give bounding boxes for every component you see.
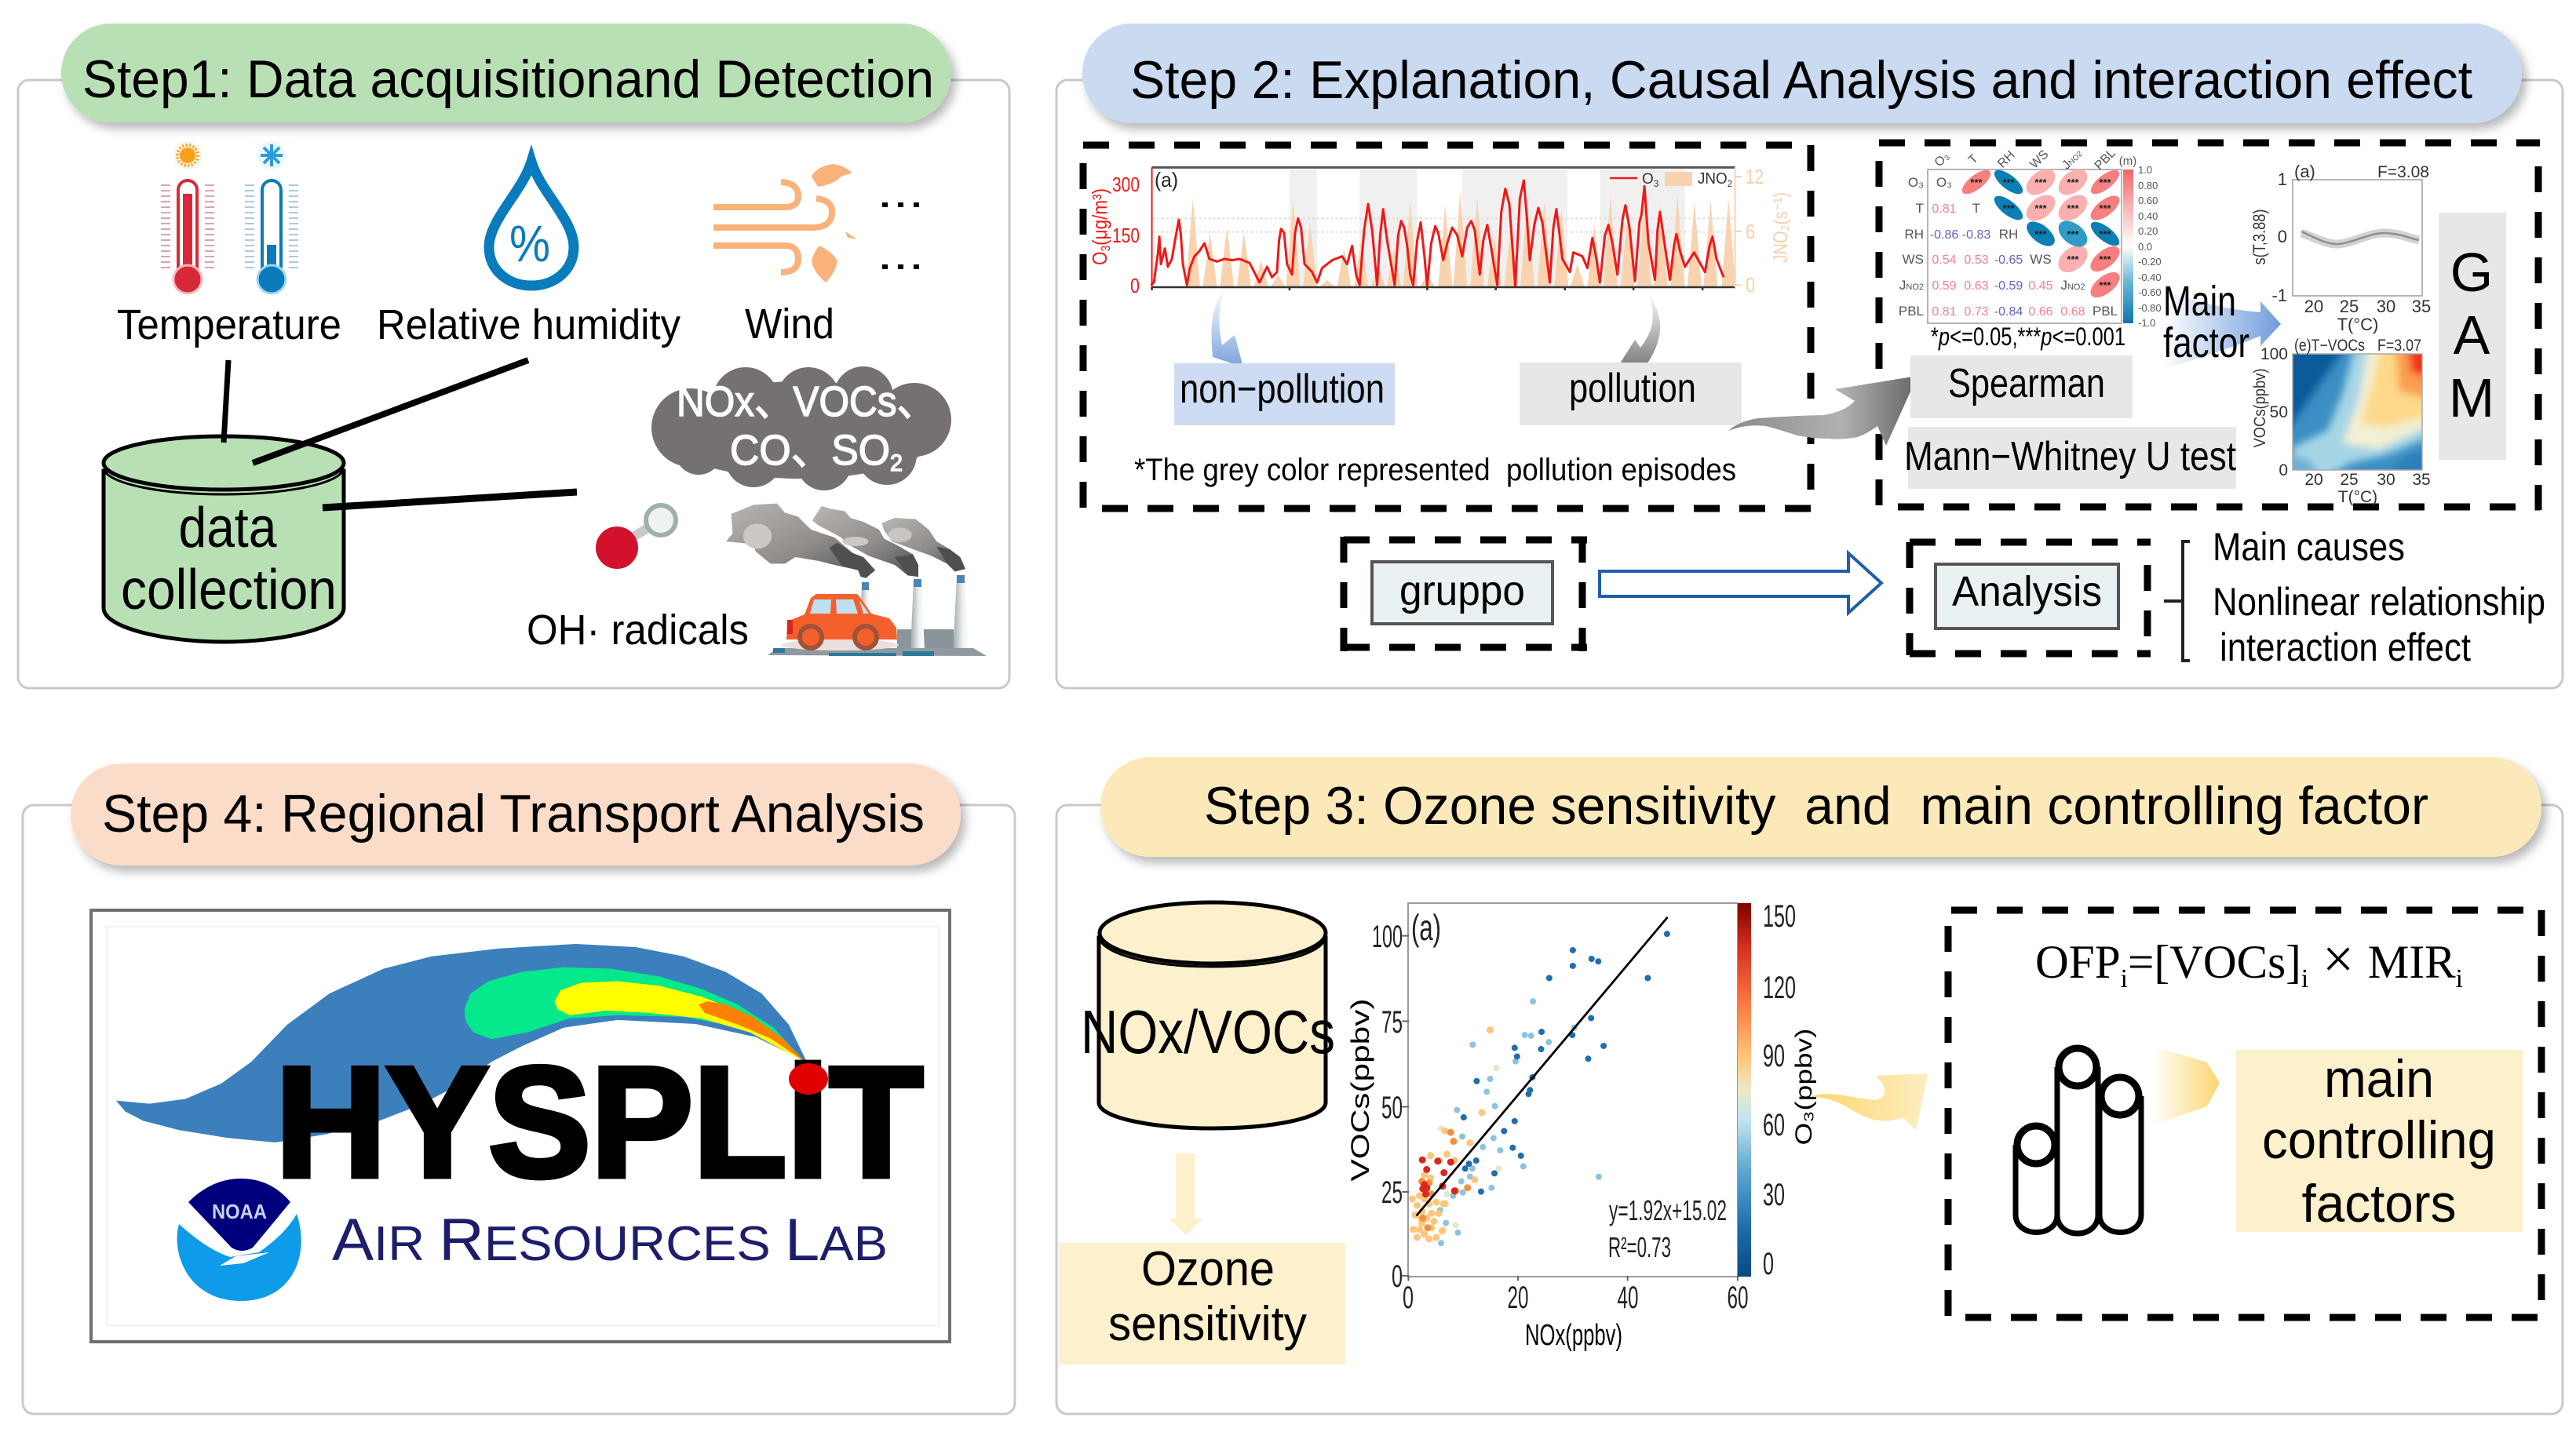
chart: Spearman correlation matrix: 0.0 <box>2138 241 2152 253</box>
icon: NOAA logo: NOAA <box>212 1200 267 1223</box>
formula: OFP: OFP <box>2035 936 2122 988</box>
label: Air Resources Lab: AIR RESOURCES LAB <box>332 1207 888 1273</box>
chart: GAM smooth function of temperature: s(T,3.88) <box>2249 209 2269 265</box>
chart: GAM T-VOCs interaction heatmap: 35 <box>2412 471 2431 489</box>
formula: OFP: MIR <box>2368 936 2456 988</box>
box: main controlling factors: controlling <box>2262 1110 2496 1170</box>
icon: hot thermometer <box>166 141 210 293</box>
heading pill: step 3 <box>1100 757 2541 857</box>
chart: O3 and JNO2 time series: O <box>1642 171 1654 188</box>
chart: VOCs vs NOx scatter: 100 <box>1372 920 1403 954</box>
chart: Spearman correlation matrix: WS <box>2030 252 2052 267</box>
box: non-pollution <box>1174 363 1395 425</box>
chart: GAM T-VOCs interaction heatmap: 50 <box>2270 403 2288 421</box>
chart: Spearman correlation matrix: *** <box>2067 202 2080 214</box>
chart: VOCs vs NOx scatter: 50 <box>1381 1091 1403 1125</box>
chart: Spearman correlation matrix: *** <box>2099 253 2112 265</box>
list: analysis results <box>2213 525 2545 669</box>
chart: Spearman correlation matrix: (m) <box>2119 155 2136 168</box>
chart: VOCs vs NOx scatter: (a) <box>1411 907 1441 948</box>
note: grey color meaning: *The grey color represented pollution episodes <box>1134 453 1736 487</box>
chart: Spearman correlation matrix: -0.80 <box>2138 302 2162 314</box>
chart: O3 and JNO2 time series <box>1088 165 1792 297</box>
database cylinder: NOx/VOCs <box>1081 902 1335 1128</box>
chart: Spearman correlation matrix: 0.20 <box>2138 225 2158 237</box>
chart: VOCs vs NOx scatter: 0 <box>1392 1259 1403 1294</box>
chart: Spearman correlation matrix: -0.59 <box>1994 279 2023 293</box>
chart: Spearman correlation matrix: O₃ <box>1908 175 1924 190</box>
box: pollution <box>1520 363 1742 425</box>
chart: GAM smooth function of temperature: 0 <box>2278 227 2287 246</box>
box: main controlling factors: factors <box>2301 1174 2457 1233</box>
heading pill: step 2 <box>1082 24 2522 123</box>
image frame: HYSPLIT logo <box>91 910 950 1342</box>
dashed box: analysis: Analysis <box>1952 568 2102 615</box>
cloud: pollutant species: 2 <box>890 450 903 476</box>
chart: GAM T-VOCs interaction heatmap: 20 <box>2304 471 2323 489</box>
chart: VOCs vs NOx scatter: 30 <box>1763 1178 1785 1212</box>
icon: humidity drop: % <box>509 214 550 272</box>
chart: Spearman correlation matrix: 0.81 <box>1932 202 1957 216</box>
chart: Spearman correlation matrix: PBL <box>1899 304 1924 319</box>
label: main factor: factor <box>2163 319 2249 366</box>
database cylinder: data collection: data <box>179 497 277 559</box>
chart: Spearman correlation matrix: 1.0 <box>2138 164 2152 176</box>
chart: O3 and JNO2 time series: (μg/m³) <box>1088 188 1111 246</box>
chart: Spearman correlation matrix: 0.81 <box>1932 305 1957 319</box>
chart: O3 and JNO2 time series: 3 <box>1100 246 1113 252</box>
chart: GAM smooth function of temperature: 1 <box>2278 169 2287 189</box>
heading pill: step 2: Step 2: Explanation, Causal Analysis and interaction effect <box>1130 50 2472 110</box>
chart: Spearman correlation matrix: *** <box>2067 228 2080 240</box>
chart: VOCs vs NOx scatter: O₃(ppbv) <box>1791 1028 1817 1146</box>
chart: Spearman correlation matrix: 0.73 <box>1964 305 1989 319</box>
chart: VOCs vs NOx scatter: VOCs(ppbv) <box>1346 998 1374 1182</box>
box: non-pollution: non−pollution <box>1180 366 1385 412</box>
chart: GAM T-VOCs interaction heatmap: 0 <box>2279 461 2288 479</box>
formula: OFP: =[VOCs] <box>2128 936 2301 988</box>
chart: Spearman correlation matrix: *** <box>2067 253 2080 265</box>
chart: Spearman correlation matrix: T <box>1972 201 1980 216</box>
chart: VOCs vs NOx scatter: 90 <box>1763 1039 1785 1073</box>
box: pollution: pollution <box>1569 366 1696 411</box>
icon: wind and leaves <box>713 164 857 282</box>
chart: VOCs vs NOx scatter: y=1.92x+15.02 <box>1609 1194 1727 1226</box>
chart: O3 and JNO2 time series: 2 <box>1728 178 1732 189</box>
bracket: analysis results <box>2164 541 2190 661</box>
connector lines to cylinder <box>224 360 577 508</box>
box: Mann-Whitney U test <box>1904 427 2236 489</box>
chart: Spearman correlation matrix: *** <box>2099 177 2112 188</box>
chart: VOCs vs NOx scatter: 60 <box>1727 1281 1749 1315</box>
chart: Spearman correlation matrix: -0.83 <box>1962 228 1990 242</box>
icon: factory smoke and car <box>726 504 987 656</box>
chart: Spearman correlation matrix: PBL <box>2093 147 2118 173</box>
icon: three cylinders <box>2016 1048 2141 1233</box>
chart: GAM smooth function of temperature: F=3.08 <box>2377 163 2429 181</box>
box: GAM: A <box>2454 304 2490 366</box>
chart: Spearman correlation matrix: JNO2 <box>2060 147 2085 172</box>
label: wind: Wind <box>745 301 834 348</box>
chart: GAM T-VOCs interaction heatmap: T(°C) <box>2338 488 2377 506</box>
heading pill: step 1: Step1: Data acquisitionand Detection <box>82 49 934 109</box>
chart: GAM smooth function of temperature: 35 <box>2412 297 2431 316</box>
chart: VOCs vs NOx scatter: NOx(ppbv) <box>1525 1319 1622 1352</box>
dashed box: analysis <box>1910 542 2151 655</box>
chart: Spearman correlation matrix: RH <box>1995 148 2018 171</box>
icon: OH radical molecule <box>596 505 676 569</box>
dashed box: gruppo <box>1344 537 1587 651</box>
chart: GAM smooth function of temperature: (a) <box>2294 162 2315 181</box>
chart: Spearman correlation matrix: JNO2 <box>1899 278 1924 293</box>
chart: VOCs vs NOx scatter: R²=0.73 <box>1608 1231 1671 1263</box>
chart: Spearman correlation matrix: -0.60 <box>2138 286 2162 298</box>
chart: Spearman correlation matrix: -0.86 <box>1930 228 1958 242</box>
chart: Spearman correlation matrix: -0.65 <box>1994 253 2023 267</box>
chart: GAM smooth function of temperature: -1 <box>2271 286 2287 305</box>
heading pill: step 1 <box>61 24 951 122</box>
large arrow: pollution to Spearman <box>1728 376 1917 446</box>
arrow: gruppo to analysis <box>1600 553 1881 613</box>
heading pill: step 4: Step 4: Regional Transport Analysis <box>102 784 925 844</box>
chart: Spearman correlation matrix: 0.80 <box>2138 180 2158 191</box>
dashed box: ozone time series <box>1083 145 1811 510</box>
icon: cold thermometer <box>250 141 294 293</box>
chart: GAM smooth function of temperature: 25 <box>2340 297 2359 316</box>
label: temperature: Temperature <box>117 301 341 348</box>
chart: Spearman correlation matrix: WS <box>1903 252 1924 267</box>
box: main controlling factors <box>2236 1049 2523 1233</box>
image frame: HYSPLIT logo: HYSPLiT <box>275 1035 923 1210</box>
chart: GAM smooth function of temperature: 20 <box>2304 297 2323 316</box>
chart: Spearman correlation matrix: *** <box>2099 202 2112 214</box>
chart: O3 and JNO2 time series: 6 <box>1746 220 1755 243</box>
formula: OFP: × <box>2308 927 2368 990</box>
chart: O3 and JNO2 time series: O <box>1088 250 1111 265</box>
label: main factor <box>2163 278 2249 366</box>
heading pill: step 3: Step 3: Ozone sensitivity and main controlling factor <box>1204 776 2428 836</box>
chart: Spearman correlation matrix: WS <box>2027 148 2051 171</box>
formula: OFP: i <box>2301 964 2308 993</box>
chart: O3 and JNO2 time series: JNO <box>1698 170 1729 188</box>
arrow: main factor to GAM <box>2163 290 2281 369</box>
arrow: to non-pollution <box>1212 288 1243 367</box>
chart: Spearman correlation matrix: *** <box>2034 177 2048 188</box>
icon: HYSPLIT plume <box>116 944 807 1142</box>
note: significance levels: *p<=0.05,***p<=0.001 <box>1931 322 2125 351</box>
chart: GAM T-VOCs interaction heatmap: VOCs(ppbv) <box>2251 369 2269 447</box>
chart: GAM T-VOCs interaction heatmap <box>2253 339 2430 505</box>
chart: Spearman correlation matrix: 0.54 <box>1932 253 1957 267</box>
box: Mann-Whitney U test: Mann−Whitney U test <box>1904 434 2236 479</box>
chart: GAM T-VOCs interaction heatmap: (e)T−VOCs <box>2294 337 2365 355</box>
chart: Spearman correlation matrix: O₃ <box>1936 175 1952 190</box>
chart: Spearman correlation matrix: *** <box>2099 228 2112 240</box>
chart: VOCs vs NOx scatter: 60 <box>1763 1108 1785 1142</box>
chart: GAM T-VOCs interaction heatmap: 30 <box>2377 471 2395 489</box>
chart: Spearman correlation matrix: -0.84 <box>1994 305 2023 319</box>
chart: Spearman correlation matrix: 0.59 <box>1932 279 1957 293</box>
chart: O3 and JNO2 time series: 3 <box>1654 178 1659 189</box>
chart: Spearman correlation matrix: 0.66 <box>2028 305 2053 319</box>
icon: NOAA logo <box>177 1179 301 1301</box>
chart: Spearman correlation matrix: O₃ <box>1932 150 1952 169</box>
box: GAM: G <box>2450 242 2493 303</box>
chart: VOCs vs NOx scatter: 0 <box>1403 1281 1414 1315</box>
chart: GAM smooth function of temperature: T(°C) <box>2337 315 2378 334</box>
chart: GAM T-VOCs interaction heatmap: F=3.07 <box>2377 337 2421 355</box>
cloud: pollutant species <box>651 366 951 490</box>
chart: VOCs vs NOx scatter: 75 <box>1381 1005 1403 1040</box>
icon: red source dot <box>789 1063 828 1095</box>
chart: Spearman correlation matrix: 0.68 <box>2060 305 2085 319</box>
chart: Spearman correlation matrix: T <box>1966 152 1981 167</box>
chart: GAM smooth function of temperature <box>2249 162 2431 334</box>
box: GAM <box>2439 213 2506 460</box>
chart: VOCs vs NOx scatter: 0 <box>1763 1247 1774 1281</box>
chart: Spearman correlation matrix <box>1899 147 2162 329</box>
chart: Spearman correlation matrix: *** <box>2002 177 2016 188</box>
chart: VOCs vs NOx scatter <box>1346 899 1817 1352</box>
panel: step 3 ozone sensitivity <box>1056 757 2563 1414</box>
arrow: scatter to OFP <box>1810 1073 1928 1130</box>
chart: O3 and JNO2 time series: 150 <box>1112 224 1140 247</box>
cloud: pollutant species: NOx、VOCs、 <box>677 378 936 425</box>
chart: VOCs vs NOx scatter: 120 <box>1763 971 1796 1005</box>
list: analysis results: interaction effect <box>2220 625 2471 669</box>
chart: Spearman correlation matrix: *** <box>2067 177 2080 188</box>
chart: GAM T-VOCs interaction heatmap: 25 <box>2340 471 2359 489</box>
chart: Spearman correlation matrix: 0.40 <box>2138 210 2158 222</box>
chart: Spearman correlation matrix: -1.0 <box>2138 317 2155 329</box>
dashed box: OFP <box>1948 910 2543 1320</box>
chart: O3 and JNO2 time series: 0 <box>1130 274 1140 297</box>
chart: VOCs vs NOx scatter: 40 <box>1617 1281 1639 1315</box>
chart: Spearman correlation matrix: RH <box>1904 227 1924 242</box>
chart: VOCs vs NOx scatter: 20 <box>1507 1281 1529 1315</box>
arrow: to pollution <box>1616 292 1660 370</box>
chart: Spearman correlation matrix: *** <box>2034 228 2048 240</box>
chart: GAM T-VOCs interaction heatmap: 100 <box>2260 345 2288 363</box>
label: OH radicals: OH· radicals <box>527 607 749 654</box>
formula: OFP: i <box>2456 964 2463 993</box>
chart: Spearman correlation matrix: RH <box>1999 227 2018 242</box>
panel: step 4 regional transport <box>23 763 1015 1414</box>
chart: O3 and JNO2 time series: (a) <box>1155 168 1178 191</box>
chart: Spearman correlation matrix: 0.53 <box>1964 253 1989 267</box>
database cylinder: NOx/VOCs: NOx/VOCs <box>1081 997 1335 1066</box>
box: Spearman <box>1910 355 2133 418</box>
label: main factor: Main <box>2163 278 2236 325</box>
box: main controlling factors: main <box>2324 1049 2434 1109</box>
arrow: to ozone sensitivity <box>1169 1153 1203 1235</box>
chart: Spearman correlation matrix: 0.45 <box>2028 279 2053 293</box>
chart: Spearman correlation matrix: *** <box>1970 177 1983 188</box>
chart: Spearman correlation matrix: PBL <box>2093 304 2118 319</box>
box: GAM: M <box>2449 367 2494 428</box>
dashed box: statistics and GAM <box>1879 143 2540 510</box>
chart: Spearman correlation matrix: *** <box>2002 202 2016 214</box>
chart: Spearman correlation matrix: JNO2 <box>2060 278 2085 293</box>
chart: O3 and JNO2 time series: 12 <box>1746 165 1764 188</box>
chart: Spearman correlation matrix: -0.20 <box>2138 256 2162 268</box>
icon: humidity drop <box>489 162 574 286</box>
list: analysis results: Main causes <box>2213 525 2405 569</box>
formula: OFP: i <box>2121 964 2128 993</box>
dashed box: gruppo: gruppo <box>1399 567 1525 614</box>
chart: Spearman correlation matrix: 0.63 <box>1964 279 1989 293</box>
heading pill: step 4 <box>71 763 961 865</box>
panel: step 2 explanation and causal analysis <box>1056 24 2563 688</box>
chart: VOCs vs NOx scatter: 150 <box>1763 899 1796 934</box>
chart: O3 and JNO2 time series: 300 <box>1112 173 1140 196</box>
chart: O3 and JNO2 time series: JNO₂(s⁻¹) <box>1770 192 1792 263</box>
chart: Spearman correlation matrix: *** <box>2034 202 2048 214</box>
box: Spearman: Spearman <box>1948 361 2105 406</box>
chart: O3 and JNO2 time series: 0 <box>1746 273 1755 297</box>
database cylinder: data collection <box>104 436 344 642</box>
ellipsis marks <box>882 202 919 269</box>
box: ozone sensitivity: Ozone <box>1141 1242 1275 1296</box>
chart: Spearman correlation matrix: -0.40 <box>2138 271 2162 283</box>
chart: Spearman correlation matrix: T <box>1916 201 1924 216</box>
database cylinder: data collection: collection <box>121 559 337 621</box>
panel: step 1 data acquisition <box>18 24 1009 688</box>
box: ozone sensitivity: sensitivity <box>1108 1297 1307 1351</box>
chart: GAM smooth function of temperature: 30 <box>2377 297 2395 316</box>
chart: Spearman correlation matrix: *** <box>2099 279 2112 291</box>
label: relative humidity: Relative humidity <box>377 301 680 348</box>
arrow: cylinders to main factors <box>2152 1046 2220 1125</box>
chart: Spearman correlation matrix: 0.60 <box>2138 195 2158 206</box>
cloud: pollutant species: CO、SO <box>730 427 897 474</box>
box: ozone sensitivity <box>1059 1242 1345 1365</box>
chart: VOCs vs NOx scatter: 25 <box>1381 1175 1403 1210</box>
